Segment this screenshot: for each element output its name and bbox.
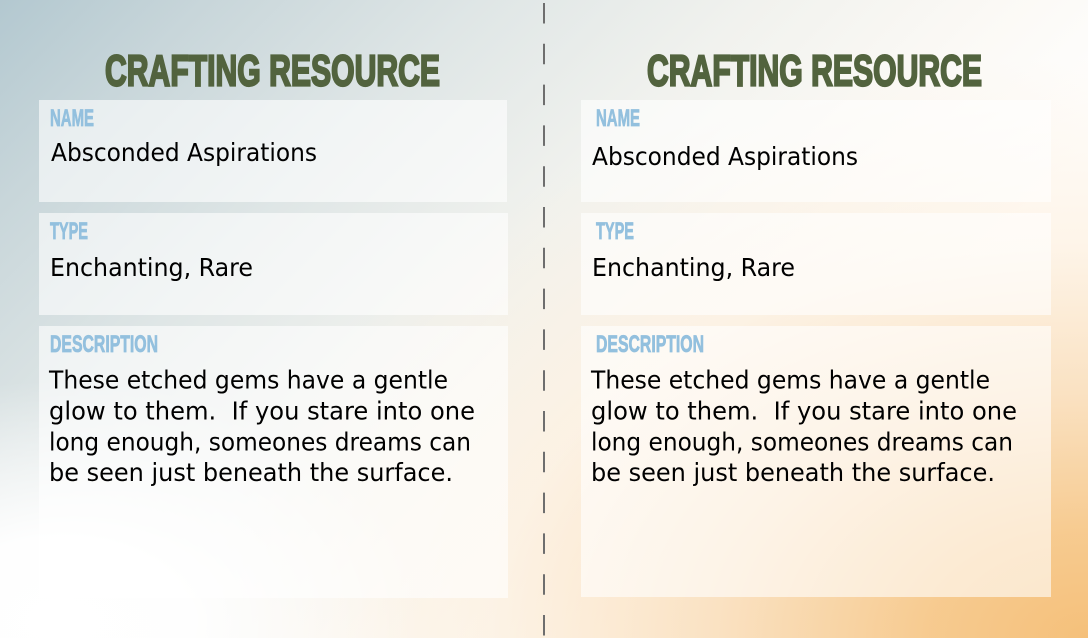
right description box: These etched gems have a gentle — [590, 366, 990, 394]
left description box — [39, 326, 508, 598]
right type box: TYPE — [596, 218, 634, 245]
left description box: DESCRIPTION — [50, 331, 158, 358]
left name box — [39, 100, 507, 202]
right type box — [581, 213, 1051, 315]
left description box: long enough, someones dreams can — [49, 428, 471, 456]
right description box: DESCRIPTION — [596, 331, 704, 358]
left type box: Enchanting, Rare — [50, 253, 253, 282]
left description box: glow to them. If you stare into one — [49, 396, 475, 426]
panel: left card — [39, 48, 508, 598]
right name box: Absconded Aspirations — [592, 142, 858, 171]
dashed centre divider — [543, 3, 545, 638]
right description box: be seen just beneath the surface. — [591, 458, 995, 487]
left type box — [39, 213, 508, 315]
left description box: These etched gems have a gentle — [48, 366, 448, 394]
right name box — [581, 100, 1051, 202]
panel: right card — [581, 48, 1051, 597]
left name box: NAME — [50, 105, 94, 132]
left name box: Absconded Aspirations — [51, 138, 317, 167]
right description box — [581, 326, 1051, 597]
left type box: TYPE — [50, 218, 88, 245]
left title: CRAFTING RESOURCE — [105, 48, 440, 96]
left description box: be seen just beneath the surface. — [49, 458, 453, 487]
right description box: long enough, someones dreams can — [591, 428, 1013, 456]
right description box: glow to them. If you stare into one — [591, 396, 1017, 426]
right name box: NAME — [596, 105, 640, 132]
right type box: Enchanting, Rare — [592, 253, 795, 282]
